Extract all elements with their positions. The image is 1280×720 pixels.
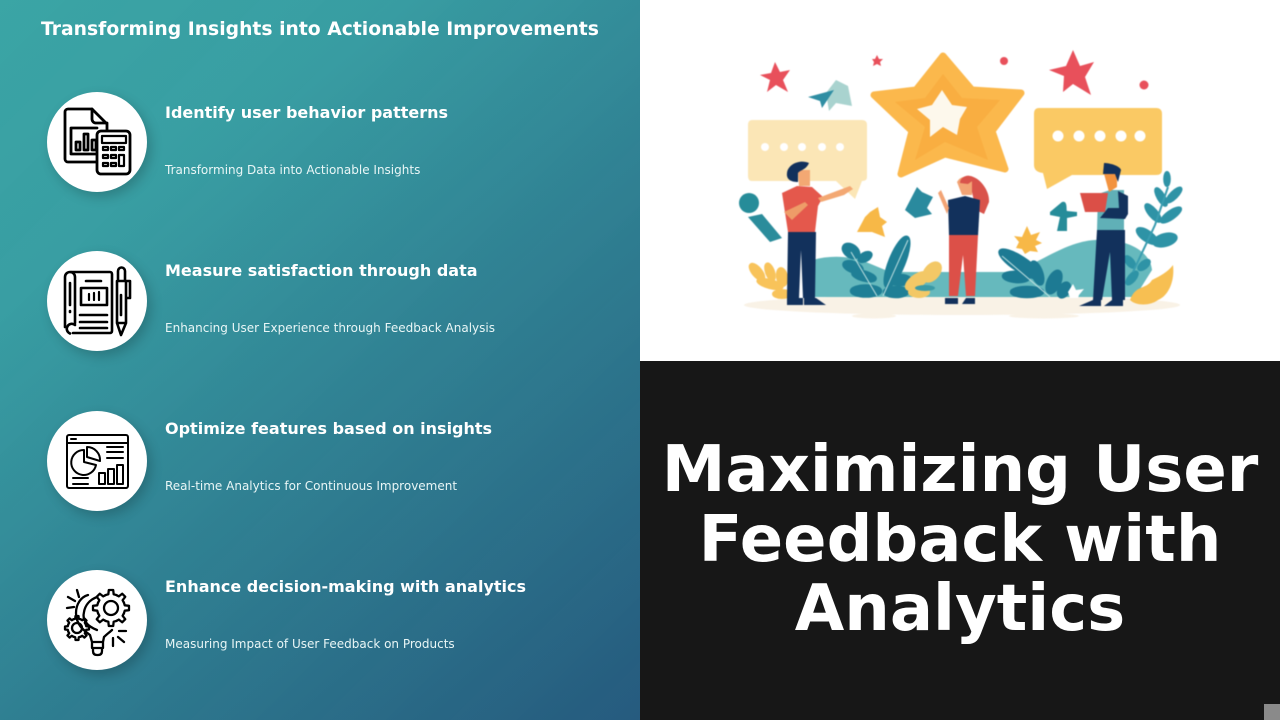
figure: woman [938,176,989,304]
heading: Identify user behavior patterns [165,103,448,122]
figure: man with red shirt [782,162,853,305]
decorative gold stars [857,207,1042,254]
ground shadow [744,295,1180,318]
decorative red stars and dots [760,50,1148,95]
icon: analytics dashboard [47,411,147,511]
panel: illustration [640,0,1280,361]
heading: Measure satisfaction through data [165,260,478,280]
corner marker [1264,704,1280,720]
icon: report book and pen [47,251,147,351]
main title [662,433,1258,646]
left speech bubble [748,120,867,199]
heading: Enhance decision-making with analytics [165,576,526,596]
description: Measuring Impact of User Feedback on Products [165,637,455,651]
list item: optimize [47,411,492,520]
description: Transforming Data into Actionable Insights [165,163,420,177]
description: Real-time Analytics for Continuous Improvement [165,479,457,493]
icon: document and calculator [47,92,147,192]
foliage left [747,234,944,298]
heading: Optimize features based on insights [165,418,492,438]
icon: lightbulb with gears [47,570,147,670]
right speech bubble [1034,108,1162,189]
main title: Maximizing User [662,433,1258,507]
list item: satisfaction [47,251,495,360]
heading: panel title: Transforming Insights into Actionable Improvements [41,19,599,40]
figure: man with tablet [1079,163,1128,306]
list item: user behavior [47,92,448,200]
foliage right [996,172,1184,304]
main title: Analytics [795,572,1125,646]
panel: headline [640,361,1280,720]
decorative teal shapes [739,80,1077,242]
main title: Feedback with [699,502,1221,576]
panel: insights [0,0,640,720]
big gold star [874,56,1021,174]
list item: decision making [47,570,526,678]
hills [813,240,1152,297]
description: Enhancing User Experience through Feedback Analysis [165,321,495,335]
